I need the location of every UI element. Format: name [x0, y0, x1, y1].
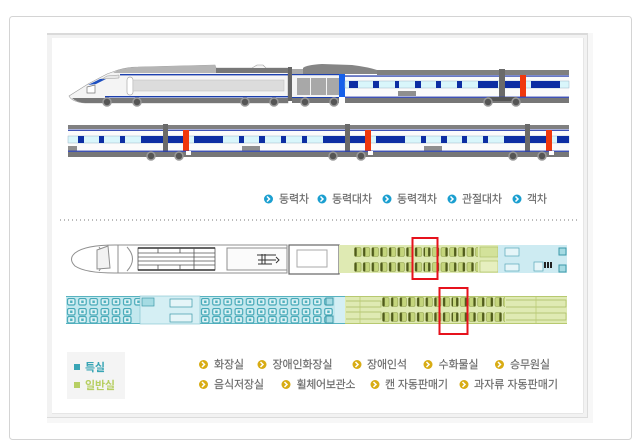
legend: class: 특실: [85, 361, 105, 374]
화장실: [199, 358, 244, 371]
train side view: row 2: [68, 124, 569, 160]
객차: [512, 192, 547, 206]
휠체어보관소: 휠체어보관소: [296, 378, 356, 391]
관절대차: [448, 192, 502, 206]
동력대차: [318, 192, 372, 206]
highlight box: row 1: [412, 238, 438, 279]
power car plan: [72, 245, 287, 273]
객차: 객차: [527, 192, 547, 206]
음식저장실: 음식저장실: [214, 378, 264, 391]
content panel: [47, 33, 593, 423]
동력대차: 동력대차: [332, 192, 372, 206]
장애인석: 장애인석: [367, 358, 407, 371]
standard cabin: [345, 296, 567, 324]
수화물실: [424, 358, 478, 371]
수화물실: 수화물실: [438, 358, 478, 371]
gap: [288, 67, 292, 101]
장애인석: [352, 358, 407, 371]
first class cabin: [66, 296, 345, 324]
캔 자동판매기: 캔 자동판매기: [385, 378, 448, 391]
관절대차: 관절대차: [462, 192, 502, 206]
wheels: [103, 98, 520, 106]
seat plan: row 2: [66, 296, 567, 324]
coach: [345, 69, 569, 103]
장애인화장실: 장애인화장실: [272, 358, 332, 371]
standard cabin: [339, 245, 498, 273]
train side view: row 1: [69, 64, 569, 106]
동력객차: 동력객차: [397, 192, 437, 206]
동력객차: [382, 192, 437, 206]
과자류 자동판매기: 과자류 자동판매기: [474, 378, 558, 391]
legend: class: 일반실: [85, 378, 115, 392]
legend: car types: [264, 192, 547, 206]
legend: class: [67, 352, 125, 399]
first class cabin: [498, 245, 567, 273]
power car: [69, 65, 288, 103]
승무원실: 승무원실: [510, 358, 550, 371]
동력차: [264, 192, 309, 206]
seat plan: row 1: [72, 245, 567, 274]
동력차: 동력차: [279, 192, 309, 206]
motor car plan: [289, 245, 339, 274]
wheels: [147, 152, 546, 160]
highlight box: row 2: [440, 288, 468, 334]
motor car: [292, 64, 377, 103]
승무원실: [495, 358, 550, 371]
legend: facilities: [199, 358, 558, 391]
화장실: 화장실: [214, 358, 244, 371]
